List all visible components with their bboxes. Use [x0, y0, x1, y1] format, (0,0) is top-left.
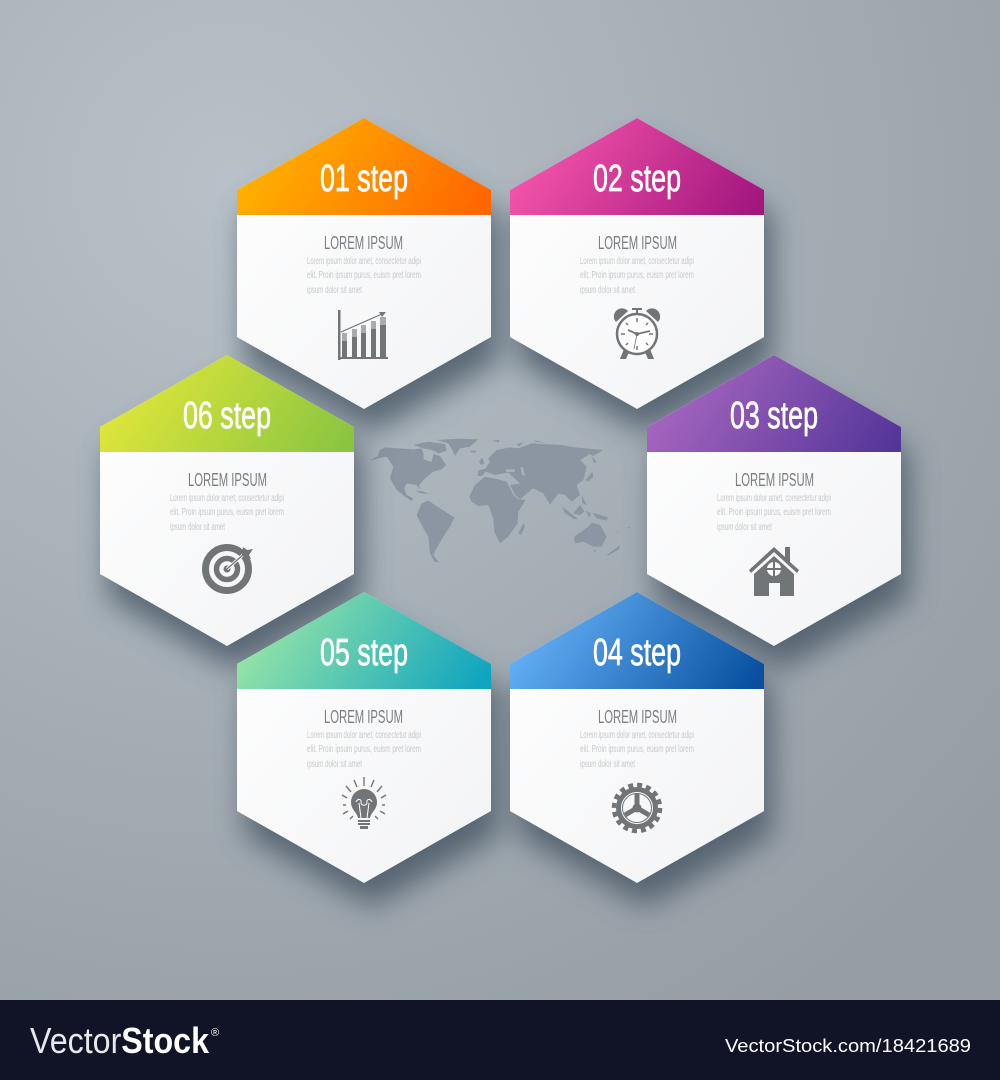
- body text: Lorem ipsum dolor amet, consectetur adipi: [307, 256, 421, 267]
- footer logo: ®: [211, 1027, 219, 1039]
- subheading: LOREM IPSUM: [324, 707, 403, 727]
- body text: elit. Proin ipsum purus, euism pret lorem: [580, 744, 694, 755]
- body text: elit. Proin ipsum purus, euism pret lorem: [717, 507, 831, 518]
- panel: step 03: [647, 355, 901, 646]
- subheading: LOREM IPSUM: [735, 470, 814, 490]
- body text: [580, 256, 694, 296]
- heading: 01 step: 01 step: [320, 158, 408, 200]
- panel: step 05: [237, 592, 491, 883]
- icon: house: [749, 547, 799, 596]
- heading: 02 step: 02 step: [593, 158, 681, 200]
- icon: bar chart: [338, 310, 388, 360]
- body text: Lorem ipsum dolor amet, consectetur adipi: [717, 493, 831, 504]
- heading: 03 step: 03 step: [730, 395, 818, 437]
- subheading: LOREM IPSUM: [598, 707, 677, 727]
- body text: elit. Proin ipsum purus, euism pret lorem: [170, 507, 284, 518]
- body text: Lorem ipsum dolor amet, consectetur adipi: [580, 730, 694, 741]
- coloured header: [237, 592, 491, 689]
- body text: ipsum dolor sit amet: [580, 285, 635, 296]
- body text: ipsum dolor sit amet: [307, 759, 362, 770]
- subheading: LOREM IPSUM: [324, 233, 403, 253]
- heading: 05 step: 05 step: [320, 632, 408, 674]
- body text: Lorem ipsum dolor amet, consectetur adipi: [307, 730, 421, 741]
- body text: ipsum dolor sit amet: [580, 759, 635, 770]
- footer logo: VectorStock: [30, 1020, 210, 1061]
- body text: [307, 730, 421, 770]
- body text: ipsum dolor sit amet: [170, 522, 225, 533]
- body text: Lorem ipsum dolor amet, consectetur adipi: [170, 493, 284, 504]
- coloured header: [100, 355, 354, 452]
- coloured header: [647, 355, 901, 452]
- coloured header: [510, 592, 764, 689]
- panel: step 06: [100, 355, 354, 646]
- hexagon body: [237, 592, 491, 883]
- panel: step 04: [510, 592, 764, 883]
- coloured header: [237, 118, 491, 215]
- footer bar: [0, 1000, 1000, 1080]
- body text: [170, 493, 284, 533]
- body text: elit. Proin ipsum purus, euism pret lorem: [307, 744, 421, 755]
- icon: light bulb: [342, 777, 386, 829]
- world map: [370, 439, 630, 562]
- footer image id: VectorStock.com/18421689: [725, 1036, 971, 1056]
- coloured header: [510, 118, 764, 215]
- hexagon body: [100, 355, 354, 646]
- hexagon body: [647, 355, 901, 646]
- hexagon body: [510, 118, 764, 409]
- hexagon shadows: [108, 142, 909, 907]
- body text: ipsum dolor sit amet: [307, 285, 362, 296]
- map: americas: [370, 439, 478, 562]
- hexagon body: [237, 118, 491, 409]
- hexagon body: [510, 592, 764, 883]
- body text: elit. Proin ipsum purus, euism pret lorem: [580, 270, 694, 281]
- icon: target: [206, 547, 253, 590]
- icon: gear: [614, 785, 660, 831]
- body text: [717, 493, 831, 533]
- icon: alarm clock: [614, 308, 660, 359]
- heading: 06 step: 06 step: [183, 395, 271, 437]
- body text: [307, 256, 421, 296]
- subheading: LOREM IPSUM: [598, 233, 677, 253]
- body text: [580, 730, 694, 770]
- subheading: LOREM IPSUM: [188, 470, 267, 490]
- body text: ipsum dolor sit amet: [717, 522, 772, 533]
- heading: 04 step: 04 step: [593, 632, 681, 674]
- body text: Lorem ipsum dolor amet, consectetur adipi: [580, 256, 694, 267]
- panel: step 01: [237, 118, 491, 409]
- map: eurasia africa oceania: [469, 440, 630, 556]
- panel: step 02: [510, 118, 764, 409]
- body text: elit. Proin ipsum purus, euism pret lorem: [307, 270, 421, 281]
